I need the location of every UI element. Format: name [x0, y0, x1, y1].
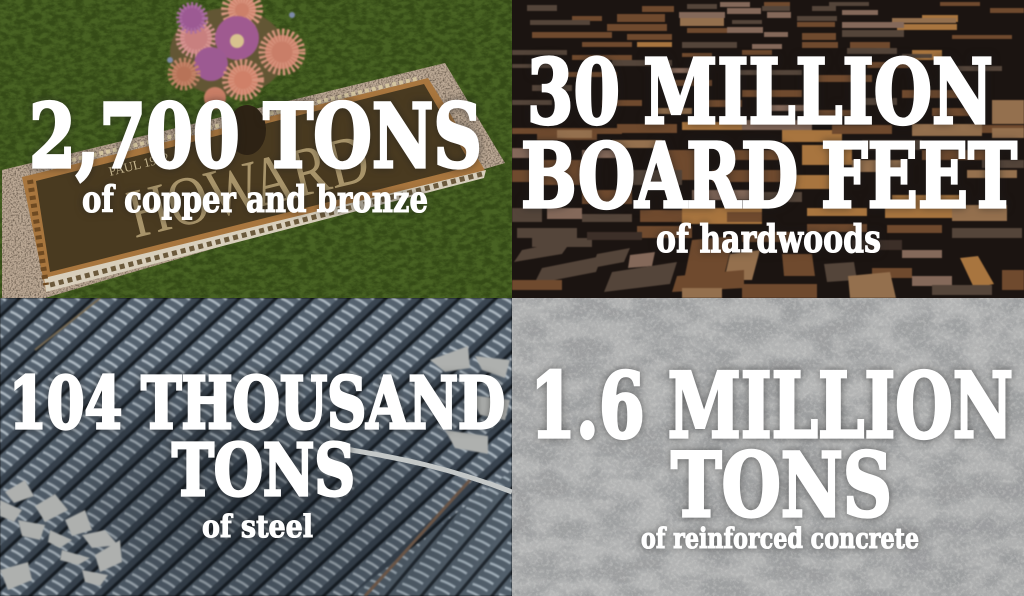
panel: hardwoods [512, 0, 1024, 298]
grave marker plaque [2, 63, 505, 298]
grass background [0, 0, 512, 298]
rebar background [0, 298, 512, 596]
panel: reinforced concrete [512, 298, 1024, 596]
caption: of copper and bronze [82, 179, 428, 221]
caption: of steel [202, 509, 313, 545]
figure line 2: TONS [172, 428, 355, 512]
rebar cut ends [0, 346, 510, 590]
stat: 1.6 million tons [530, 353, 1013, 555]
stat: 30 million board feet [521, 39, 1017, 261]
grave marker plaque: HOWARD [120, 120, 377, 254]
concrete background [512, 298, 1024, 596]
figure line 1: 104 THOUSAND [9, 361, 505, 445]
caption: of reinforced concrete [641, 522, 919, 555]
caption: of hardwoods [656, 216, 881, 261]
grave marker plaque: PAUL 1982 [107, 149, 170, 179]
steel wire [345, 449, 512, 492]
dark background [512, 0, 1024, 298]
stat: 104 thousand tons [9, 361, 505, 545]
stat: 2,700 tons [29, 84, 482, 221]
figure line 2: TONS [671, 433, 892, 537]
figure: 2,700 TONS [29, 84, 482, 188]
panel: copper and bronze [0, 0, 512, 298]
lumber stacks [512, 2, 1024, 298]
panel: steel rebar [0, 298, 512, 596]
flower vase [234, 105, 266, 155]
flower bouquet [167, 0, 299, 109]
